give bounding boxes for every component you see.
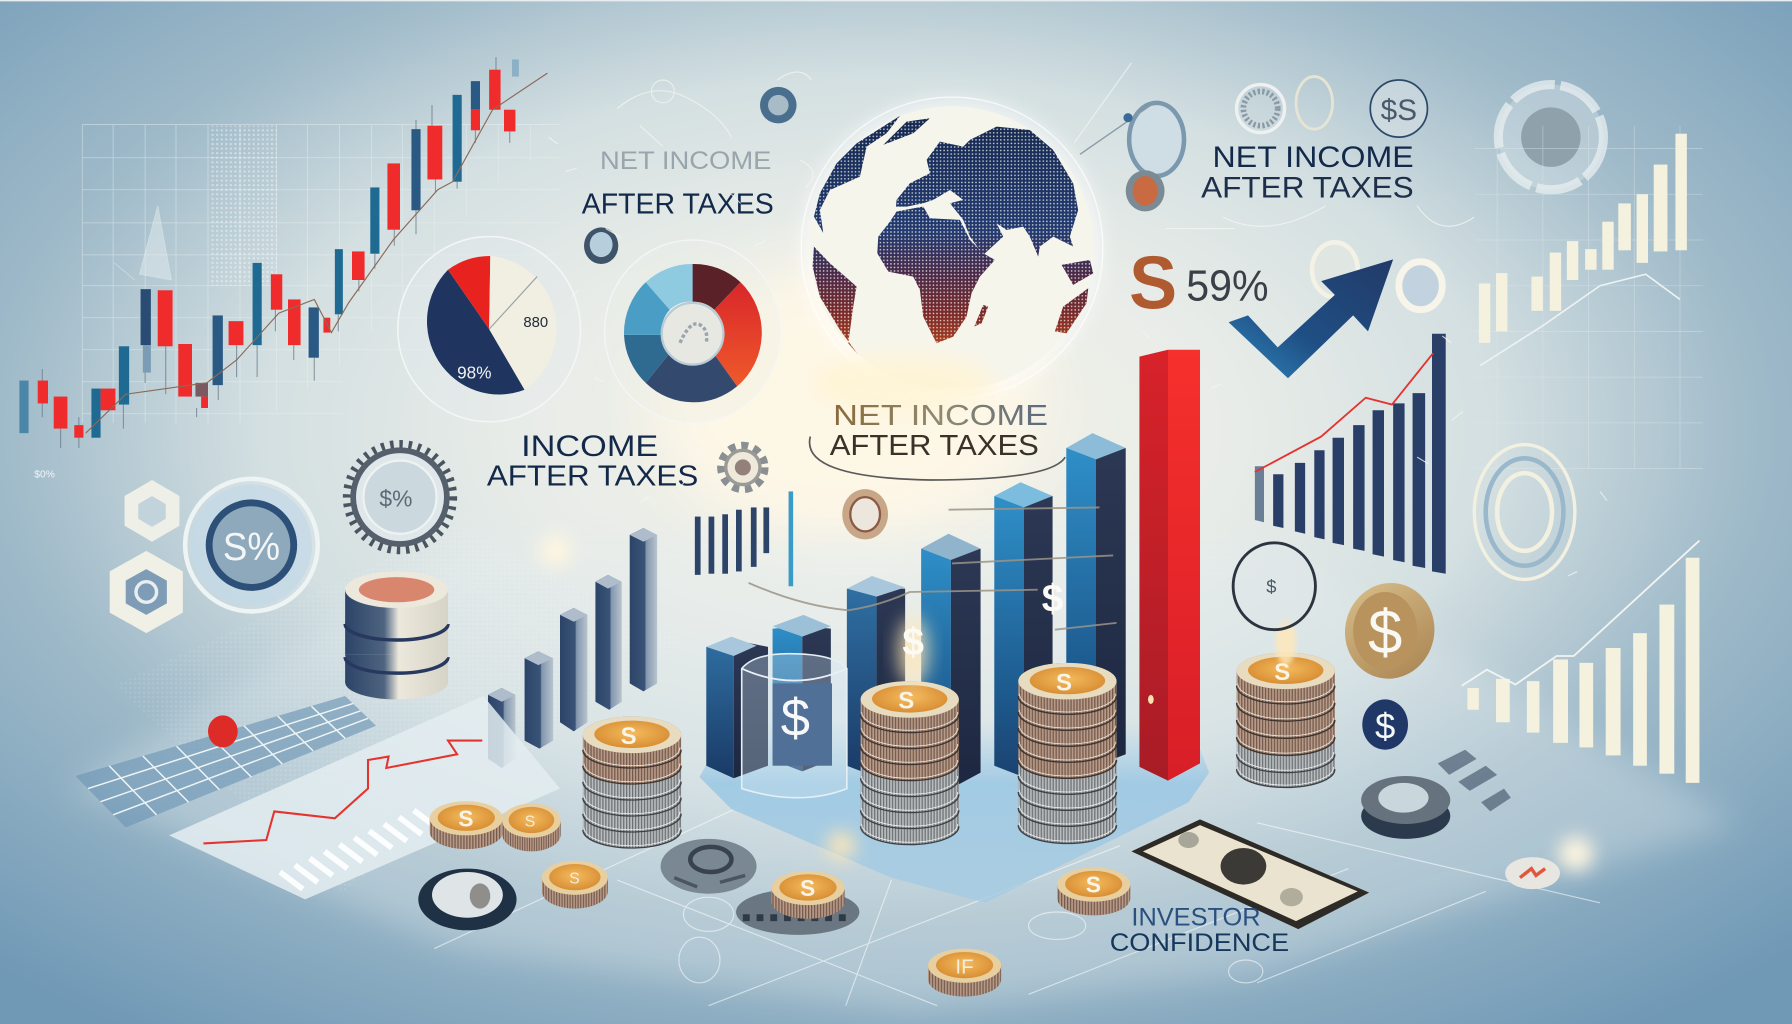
- icon: small lens: [584, 227, 618, 264]
- glow bottom: [827, 832, 855, 859]
- dotted panel: [209, 126, 277, 286]
- paper with red line chart: [169, 696, 560, 899]
- top edge line: [0, 0, 1792, 1]
- heading: income: INCOME: [521, 430, 658, 463]
- donut hub: [662, 303, 723, 365]
- grid: [1474, 126, 1703, 469]
- loose coin four: [1057, 867, 1130, 915]
- donut outer ring: [605, 240, 781, 423]
- globe halo ring: [801, 97, 1103, 399]
- heading: net income centre: NET INCOME: [833, 400, 1048, 432]
- icon: orange medallion: [1126, 170, 1165, 211]
- hub sketch: [680, 324, 707, 343]
- dollar above stack: $: [1042, 577, 1064, 620]
- blue candles: [19, 59, 519, 438]
- loose coin four: S: [1086, 872, 1101, 898]
- loose coin three: S: [569, 870, 580, 887]
- label: investor: INVESTOR: [1131, 904, 1261, 932]
- small label: $0%: [34, 470, 55, 481]
- slice divider: [489, 277, 537, 329]
- navy bar chart right: [1255, 334, 1446, 574]
- floor sketches: [434, 800, 1600, 1006]
- banknote: [1131, 819, 1369, 929]
- loose coin bottom: IF: [955, 956, 974, 979]
- bar A: [706, 637, 768, 778]
- candle wicks: [42, 57, 510, 448]
- icon: large gear: $%: [379, 485, 412, 511]
- icon: percent gear: S%: [223, 526, 280, 569]
- candlestick chart: [19, 57, 560, 481]
- loose coin three: [542, 861, 608, 909]
- icon: magnifier: [1080, 103, 1184, 176]
- icon: centre target: [842, 489, 888, 539]
- icon: hexagon bottom: [110, 551, 183, 633]
- icon: large gear: [347, 445, 453, 550]
- loose coin one: S: [458, 805, 474, 831]
- heading: after taxes centre: AFTER TAXES: [830, 430, 1039, 462]
- red slice: [448, 256, 490, 329]
- navy slice: [427, 270, 525, 394]
- dollar glow centre: [898, 617, 928, 686]
- icon: gold dollar coin: [1336, 575, 1443, 687]
- icon: pale lens one: [1312, 242, 1358, 297]
- globe: [801, 97, 1103, 413]
- icon: navy dollar coin: [1362, 699, 1408, 750]
- floor dot texture: [114, 526, 686, 891]
- icon: gold dollar coin: $: [1368, 599, 1402, 668]
- donut chart: [605, 240, 781, 423]
- heading: after taxes left: AFTER TAXES: [582, 189, 774, 221]
- loose coin two: [502, 803, 561, 851]
- maroon segment: [693, 264, 741, 310]
- bar E: [994, 482, 1053, 777]
- icon: grey gear with coin: [736, 871, 859, 935]
- small bars behind: [695, 491, 793, 586]
- globe sphere: [810, 106, 1094, 390]
- coin stack right of centre: [1018, 663, 1117, 843]
- navy segment: [646, 353, 737, 402]
- pie value navy: 98%: [457, 362, 491, 382]
- deep blue segment: [624, 335, 670, 383]
- icon: grey gear with coin: S: [800, 875, 815, 901]
- dollar glow centre: $: [902, 621, 924, 664]
- cream bar chart lower right: [1462, 541, 1699, 783]
- pie value cream: 880: [523, 315, 548, 331]
- warm central glow: [651, 263, 1040, 537]
- paper sheet: [169, 696, 560, 899]
- icon: dollar circle: $S: [1381, 94, 1417, 127]
- bar B: [773, 615, 831, 771]
- coin stack far left: [583, 717, 681, 848]
- label: confidence: CONFIDENCE: [1110, 929, 1289, 957]
- faint sketch: [114, 206, 171, 280]
- heading: after taxes: AFTER TAXES: [487, 461, 698, 493]
- loose coin two: S: [525, 813, 535, 830]
- navy panel in cup: [773, 683, 832, 766]
- heading ring: [810, 437, 1065, 480]
- bar C: [847, 576, 905, 777]
- paper stripes: [280, 810, 437, 889]
- icon: red pin: [208, 715, 238, 747]
- concentric circles: [1474, 445, 1575, 579]
- sunrise glow: [811, 353, 994, 413]
- bars: [1467, 558, 1699, 783]
- red candles: [38, 70, 515, 438]
- icon: fingerprint circle: [1237, 85, 1285, 133]
- big S symbol: S: [1129, 241, 1177, 325]
- floor plane: [69, 537, 1737, 1011]
- coin stack right of centre: S: [1056, 669, 1072, 696]
- rising line: [1480, 274, 1680, 366]
- growth arrow: [1229, 259, 1393, 378]
- continents dotted: [813, 116, 1093, 355]
- glow left: [539, 535, 571, 567]
- icon: dark lens right: [1361, 776, 1450, 839]
- glow right: [1559, 837, 1593, 871]
- coin stack centre: [861, 681, 959, 845]
- coin stack far left: S: [621, 723, 637, 750]
- coin stack right: [1237, 619, 1335, 787]
- isometric grid mat: [75, 696, 376, 827]
- icon: grey medallion: [661, 839, 757, 894]
- light blue segment: [646, 264, 693, 310]
- icon: top dark badge: [760, 87, 797, 123]
- icon: dark ring lens: $: [1266, 576, 1276, 597]
- red trend line: [1255, 353, 1433, 472]
- ribbon lines: [749, 507, 1117, 630]
- pie outer ring: [398, 237, 581, 422]
- heading: net income right: NET INCOME: [1213, 141, 1414, 174]
- candles: [1479, 134, 1687, 343]
- ghost heading: net income: NET INCOME: [600, 147, 771, 175]
- loose coin one: [430, 801, 503, 849]
- percentage value: 59%: [1186, 263, 1269, 311]
- bars: [1255, 334, 1446, 574]
- coin stack right: S: [1274, 659, 1290, 686]
- glass platform: [699, 720, 1209, 903]
- rising bars left: [488, 528, 657, 768]
- bar D: [921, 534, 981, 789]
- cream candle chart right: [1474, 126, 1703, 469]
- doodles upper centre: [549, 63, 1607, 576]
- red segment: [714, 282, 762, 386]
- icon: pale red token: [1505, 857, 1560, 889]
- heading: after taxes right: AFTER TAXES: [1201, 172, 1414, 205]
- glass cup: [742, 654, 847, 798]
- loose coin bottom: [928, 949, 1001, 997]
- icon: hexagon top: [125, 480, 179, 542]
- candlestick grid: [82, 125, 560, 423]
- coin stack centre: S: [898, 688, 914, 715]
- globe glow: [801, 97, 1103, 399]
- icon: navy dollar coin: $: [1375, 705, 1395, 746]
- icon: pale lens two: [1399, 262, 1442, 310]
- icon: percent gear: [185, 479, 318, 611]
- dollar in cup: $: [781, 689, 810, 748]
- trend line: [86, 73, 547, 433]
- icon: wheel chart: [1498, 85, 1603, 190]
- icon: outline oval: [1296, 77, 1333, 129]
- pie chart: [398, 237, 581, 422]
- small bank notes: [1438, 750, 1511, 811]
- red line: [203, 741, 482, 843]
- icon: dark lens: [418, 869, 517, 930]
- bar F: [1066, 433, 1126, 766]
- main bar chart: [695, 350, 1200, 798]
- icon: dark ring lens: [1233, 543, 1315, 630]
- red bar: [1139, 350, 1200, 781]
- icon: dollar circle: [1370, 80, 1427, 137]
- database cylinder: [345, 571, 448, 699]
- cream slice: [489, 256, 557, 390]
- icon: small gear: [721, 446, 765, 489]
- mid blue segment: [624, 282, 670, 335]
- rising line: [1462, 541, 1699, 686]
